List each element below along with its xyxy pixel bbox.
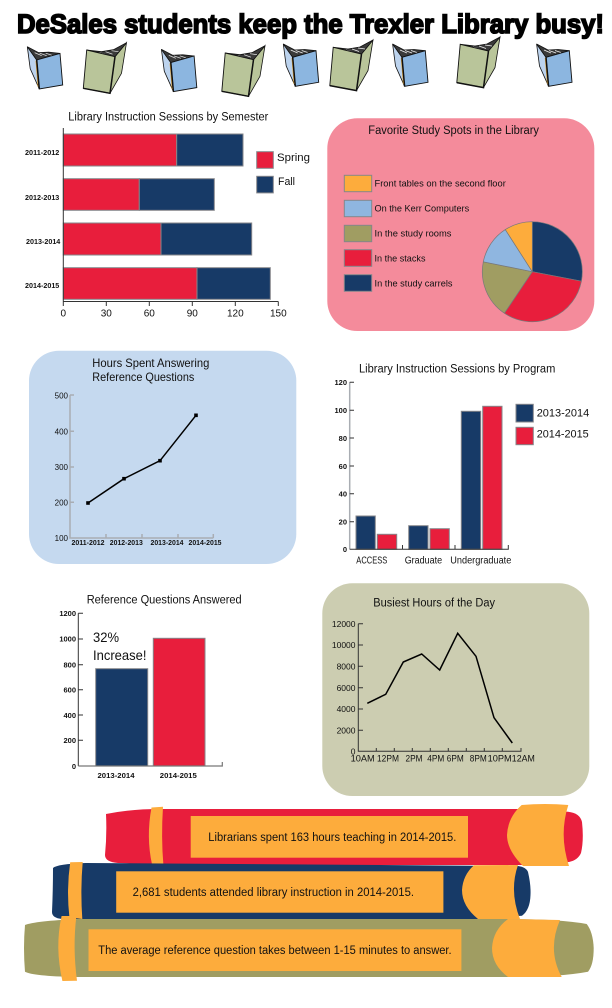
line chart: 300 — [55, 463, 69, 472]
grouped bar chart: 100 — [334, 406, 347, 415]
line chart: 2012-2013 — [110, 538, 143, 547]
line chart: 8PM — [470, 754, 487, 764]
stacked bar chart: 0 — [61, 308, 67, 320]
panel: favorite study spots — [327, 118, 594, 331]
callout — [93, 629, 146, 663]
grouped bar chart: 0 — [343, 545, 347, 554]
line chart: 100 — [55, 534, 69, 543]
line chart: 10PM — [488, 754, 512, 764]
heading: Library Instruction Sessions by Semester — [68, 112, 268, 124]
red book — [105, 804, 583, 866]
pie chart — [482, 222, 582, 322]
stacked bar chart: 60 — [144, 308, 155, 320]
stacked bar chart — [25, 128, 287, 320]
red book: Librarians spent 163 hours teaching in 2014-2015. — [208, 832, 456, 844]
grouped bar chart: 20 — [339, 518, 347, 526]
bar chart: 800 — [63, 660, 76, 670]
line chart: 12000 — [332, 619, 356, 629]
line chart: 4000 — [337, 704, 356, 714]
panel: instruction sessions by semester — [25, 112, 310, 320]
grouped bar chart: Undergraduate — [450, 556, 512, 566]
icon: green book 1 — [83, 43, 126, 93]
panel: hours answering reference questions — [29, 351, 296, 564]
callout: 32% — [93, 629, 119, 645]
bar chart: 2014-2015 — [160, 771, 197, 780]
line chart: 4PM — [427, 754, 444, 764]
line chart: 0 — [351, 746, 356, 756]
grouped bar chart — [334, 378, 512, 566]
bar chart — [59, 609, 222, 780]
icon: blue book 4 — [393, 44, 428, 86]
legend — [516, 404, 589, 445]
book stack — [24, 804, 594, 981]
heading: Favorite Study Spots in the Library — [368, 125, 539, 137]
grouped bar chart: 60 — [339, 462, 347, 471]
legend: In the study rooms — [374, 229, 452, 240]
heading: Hours Spent Answering — [92, 356, 209, 370]
icon: blue book 3 — [283, 44, 319, 86]
line chart: 400 — [55, 428, 69, 436]
line chart: 6PM — [447, 754, 464, 764]
navy book: 2,681 students attended library instruction in 2014-2015. — [133, 887, 414, 899]
legend — [257, 152, 310, 193]
grouped bar chart: Graduate — [405, 556, 443, 566]
stacked bar chart: 120 — [227, 308, 244, 320]
line chart — [332, 619, 535, 764]
stacked bar chart: 2014-2015 — [25, 281, 59, 290]
line chart: 500 — [55, 392, 69, 400]
line chart: 8000 — [337, 662, 356, 672]
stacked bar chart: 2012-2013 — [25, 193, 59, 202]
legend: 2014-2015 — [537, 428, 589, 440]
legend: On the Kerr Computers — [374, 204, 469, 215]
stacked bar chart: 150 — [270, 308, 287, 320]
legend: In the study carrels — [374, 279, 453, 290]
icon: blue book 1 — [27, 47, 63, 89]
bar chart: 1000 — [59, 634, 76, 644]
legend: 2013-2014 — [537, 408, 589, 420]
bar chart: 400 — [63, 711, 76, 720]
olive book: The average reference question takes between 1-15 minutes to answer. — [98, 945, 452, 957]
line chart: 2PM — [406, 754, 422, 764]
line chart: 12PM — [377, 754, 399, 764]
icon: green book 4 — [457, 37, 500, 88]
icon: blue book 5 — [537, 44, 572, 86]
panel: reference questions answered — [59, 594, 242, 780]
grouped bar chart: 120 — [334, 378, 347, 387]
legend: Fall — [278, 176, 295, 188]
legend — [344, 175, 506, 291]
line chart: 6000 — [337, 683, 356, 693]
heading — [92, 356, 209, 384]
legend: Front tables on the second floor — [374, 179, 506, 190]
stacked bar chart: 2013-2014 — [26, 237, 61, 246]
stacked bar chart: 2011-2012 — [25, 148, 59, 157]
line chart: 2014-2015 — [188, 538, 222, 547]
line chart — [55, 392, 222, 547]
bar chart: 200 — [63, 736, 76, 745]
navy book — [52, 862, 531, 919]
panel: instruction sessions by program — [334, 363, 589, 566]
heading: Reference Questions — [92, 370, 194, 384]
line chart: 2011-2012 — [72, 538, 104, 547]
heading: Reference Questions Answered — [87, 594, 242, 606]
legend: In the stacks — [374, 254, 426, 265]
bar chart: 600 — [63, 686, 76, 694]
icon: blue book 2 — [161, 49, 197, 92]
panel: busiest hours — [322, 583, 589, 796]
olive book — [24, 916, 594, 981]
grouped bar chart: 40 — [339, 490, 347, 498]
stacked bar chart: 30 — [101, 308, 112, 320]
bar chart: 1200 — [59, 609, 76, 618]
row of book icons — [27, 37, 572, 96]
grouped bar chart: ACCESS — [356, 556, 388, 566]
icon: green book 2 — [222, 46, 265, 96]
callout: Increase! — [93, 647, 146, 663]
icon: green book 3 — [330, 40, 373, 91]
line chart: 10AM — [351, 754, 375, 764]
line chart: 200 — [55, 498, 69, 508]
heading: Busiest Hours of the Day — [373, 598, 495, 610]
line chart: 12AM — [512, 754, 535, 764]
line chart: 2013-2014 — [150, 538, 184, 547]
line chart: 10000 — [332, 640, 356, 650]
grouped bar chart: 80 — [339, 434, 347, 443]
stacked bar chart: 90 — [187, 308, 198, 320]
line chart: 2000 — [337, 726, 356, 736]
bar chart: 2013-2014 — [98, 771, 135, 780]
bar chart: 0 — [72, 762, 76, 771]
legend: Spring — [277, 152, 310, 164]
heading: Library Instruction Sessions by Program — [359, 363, 555, 375]
